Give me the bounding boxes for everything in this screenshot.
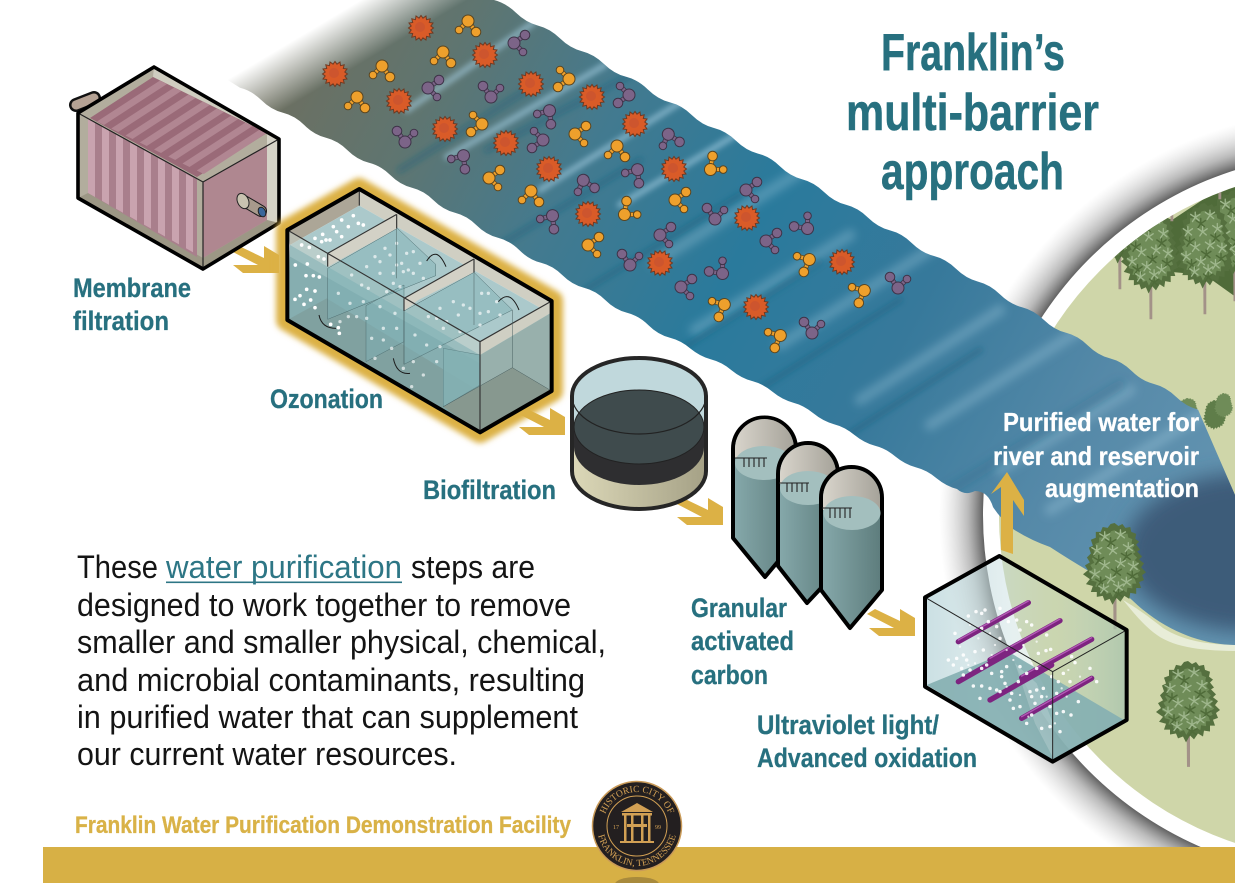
glow around ozonation tank	[287, 189, 552, 432]
body text block: our current water resources.	[77, 736, 457, 772]
title: approach	[881, 143, 1064, 201]
seal: Historic City of Franklin: HISTORIC CITY OF	[600, 786, 674, 814]
body text block: in purified water that can supplement	[77, 699, 578, 735]
tree beside reservoir	[1083, 523, 1146, 629]
label: ultraviolet light / advanced oxidation: Ultraviolet light/	[757, 710, 939, 740]
river with contaminants	[230, 0, 1235, 651]
seal: Historic City of Franklin	[592, 780, 682, 872]
title: Franklin’s	[881, 24, 1065, 82]
arrow: purified water upward	[991, 472, 1024, 554]
trees upper group	[1114, 187, 1235, 320]
title	[846, 24, 1099, 201]
arrow: ozonation to biofiltration	[517, 408, 565, 435]
title: multi-barrier	[846, 84, 1099, 142]
seal: Historic City of Franklin: 99	[655, 825, 661, 831]
purple UV lamps	[958, 601, 1092, 718]
background landscape disc	[945, 130, 1235, 847]
label: granular activated carbon: Granular	[691, 593, 787, 623]
label: granular activated carbon: activated	[691, 626, 794, 656]
icon: biofiltration cylinder	[572, 358, 706, 509]
body text block: steps are	[411, 549, 535, 585]
label: purified water	[993, 407, 1199, 503]
arrow: biofiltration to granular activated carbon	[675, 498, 723, 525]
orange molecules	[344, 15, 876, 354]
bubbles	[948, 608, 1097, 732]
flow arrows	[319, 254, 519, 373]
body text block: designed to work together to remove	[77, 587, 571, 623]
arrow: carbon to ultraviolet	[867, 609, 915, 636]
icon: ozonation tank	[287, 189, 552, 432]
tree lower right	[1156, 661, 1220, 767]
label: membrane filtration	[73, 273, 191, 336]
river water streaks	[400, 23, 1200, 510]
seal reflection	[615, 877, 659, 883]
footer gold bar	[43, 847, 1235, 883]
label: membrane filtration: filtration	[73, 306, 169, 336]
body text block	[77, 549, 606, 772]
arrow: membrane to ozonation	[231, 246, 279, 273]
beach strip	[1123, 600, 1240, 651]
label: ozonation: Ozonation	[270, 384, 383, 414]
label: membrane filtration: Membrane	[73, 273, 191, 303]
body text block: These	[77, 549, 158, 585]
icon: membrane filtration unit	[76, 67, 279, 269]
outlet pipe	[235, 191, 267, 218]
silo 1	[733, 418, 796, 577]
dark reservoir	[1124, 472, 1260, 632]
bushes	[1176, 393, 1233, 430]
label: purified water: augmentation	[1045, 473, 1199, 503]
silo 3	[821, 467, 882, 628]
body text block: and microbial contaminants, resulting	[77, 662, 585, 698]
right margin	[1235, 0, 1260, 883]
label: granular activated carbon	[691, 593, 794, 690]
label: granular activated carbon: carbon	[691, 660, 768, 690]
icon: granular activated carbon silos	[733, 418, 882, 628]
faded upstream end	[0, 0, 600, 220]
inlet pipe	[76, 98, 94, 105]
body text block: water purification	[165, 549, 402, 585]
label: ultraviolet light / advanced oxidation: Advanced oxidation	[757, 743, 977, 773]
purple molecules	[392, 30, 911, 339]
seal building	[620, 803, 654, 843]
label: purified water: river and reservoir	[993, 441, 1199, 471]
ozone bubbles	[295, 216, 363, 333]
baffle panels	[328, 228, 512, 364]
label: biofiltration: Biofiltration	[423, 475, 556, 505]
icon: ultraviolet light reactor	[925, 556, 1127, 762]
silo 2	[778, 443, 838, 603]
seal: Historic City of Franklin: FRANKLIN, TENNESSEE	[598, 834, 676, 868]
seal: Historic City of Franklin: 17	[613, 825, 619, 831]
label: ultraviolet light / advanced oxidation	[757, 710, 977, 773]
body text block: smaller and smaller physical, chemical,	[77, 624, 606, 660]
label: purified water: Purified water for	[1003, 407, 1199, 437]
viruses	[322, 16, 854, 320]
footer facility name: Franklin Water Purification Demonstration Facility	[75, 812, 572, 839]
